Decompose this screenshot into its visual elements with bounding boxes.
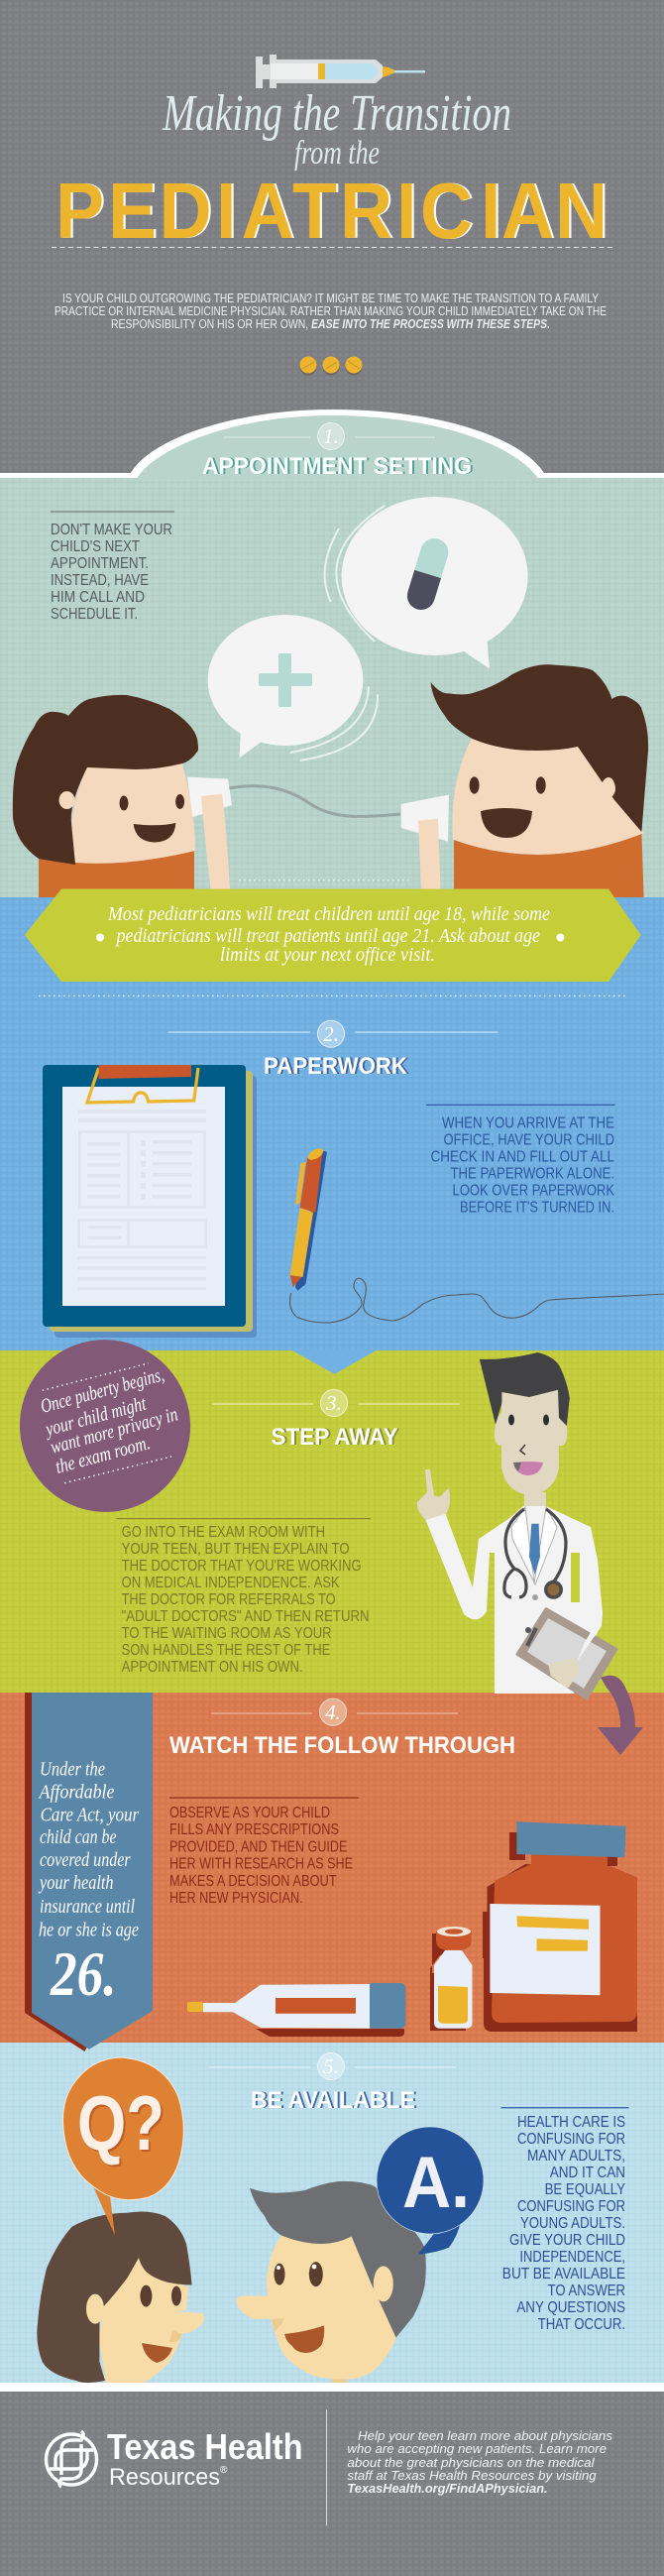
- text block: step away: "ADULT DOCTORS" AND THEN RETURN: [122, 1608, 370, 1625]
- illustration: girl: [37, 2211, 204, 2383]
- callout banner: age limits: Most pediatricians will treat children until age 18, while some: [107, 903, 550, 925]
- footer text: [347, 2428, 612, 2496]
- text block: appointment: DON'T MAKE YOUR: [51, 522, 172, 538]
- ribbon: affordable care act: your health: [38, 1872, 113, 1894]
- ribbon: affordable care act: child can be: [40, 1826, 117, 1848]
- text block: be available: [501, 2107, 628, 2333]
- illustration: vial: [430, 1927, 472, 2031]
- illustration: child with cup phone: [13, 695, 232, 897]
- step 1 number: [224, 422, 435, 450]
- text block: be available: AND IT CAN: [550, 2165, 625, 2181]
- text block: be available: MANY ADULTS,: [527, 2148, 625, 2165]
- title: making the transition: Making the Transition: [162, 85, 511, 142]
- icon: large speech bubble with capsule: [325, 497, 528, 668]
- blue notch: [291, 1350, 377, 1374]
- ribbon: affordable care act: Affordable: [38, 1781, 115, 1803]
- illustration: parent with cup phone: [401, 664, 648, 897]
- footer text: Help your teen learn more about physicians: [358, 2428, 612, 2443]
- icon: syringe: [256, 55, 425, 88]
- callout: puberty privacy: the exam room.: [54, 1432, 153, 1478]
- icon: purple arrow: [598, 1676, 643, 1755]
- text block: paperwork: THE PAPERWORK ALONE.: [450, 1165, 614, 1182]
- step 3 number: 3.: [325, 1391, 342, 1415]
- text block: be available: ANY QUESTIONS: [516, 2299, 625, 2316]
- callout: puberty privacy: your child might: [42, 1393, 149, 1441]
- title: pediatrician: PEDIATRICIAN: [57, 167, 609, 256]
- illustration: clipboard: [43, 1065, 257, 1338]
- intro text: [55, 292, 607, 331]
- text block: be available: BUT BE AVAILABLE: [502, 2266, 625, 2283]
- step 5 number: [209, 2052, 456, 2080]
- text block: step away: THE DOCTOR THAT YOU'RE WORKING: [122, 1558, 362, 1575]
- panel: be available background: [0, 2043, 664, 2383]
- step 1 number: 1.: [323, 424, 339, 448]
- text block: step away: THE DOCTOR FOR REFERRALS TO: [122, 1591, 336, 1608]
- ribbon: affordable care act: 26.: [50, 1938, 117, 2009]
- logo: wordmark: [107, 2426, 303, 2491]
- text block: follow through: HER WITH RESEARCH AS SHE: [169, 1855, 353, 1872]
- text block: paperwork: [426, 1105, 614, 1216]
- logo: wordmark: Texas Health: [107, 2426, 303, 2467]
- illustration: doctor: [417, 1352, 616, 1698]
- text block: paperwork: OFFICE, HAVE YOUR CHILD: [444, 1131, 614, 1148]
- text block: follow through: [169, 1797, 359, 1907]
- icon: small speech bubble with plus: [208, 615, 378, 761]
- logo: wordmark: ®: [220, 2465, 228, 2476]
- heading: paperwork: PAPERWORK: [264, 1053, 408, 1080]
- callout banner: age limits: [25, 888, 641, 982]
- text block: follow through: MAKES A DECISION ABOUT: [169, 1873, 337, 1890]
- text block: step away: GO INTO THE EXAM ROOM WITH: [122, 1524, 325, 1541]
- logo: texas health mark: [46, 2431, 97, 2487]
- panel: follow through background: [0, 1693, 664, 2043]
- text block: appointment: [51, 512, 174, 623]
- white footer divider: [0, 2383, 664, 2392]
- text block: be available: THAT OCCUR.: [538, 2316, 625, 2333]
- text block: step away: YOUR TEEN, BUT THEN EXPLAIN TO: [122, 1541, 350, 1558]
- text block: follow through: PROVIDED, AND THEN GUIDE: [169, 1838, 347, 1855]
- ribbon: affordable care act: Under the: [40, 1759, 105, 1781]
- text block: appointment: SCHEDULE IT.: [51, 606, 138, 623]
- heading: appointment setting: APPOINTMENT SETTING: [202, 453, 472, 480]
- text block: be available: BE EQUALLY: [545, 2181, 625, 2198]
- text block: step away: [117, 1518, 371, 1676]
- ribbon: affordable care act: he or she is age: [39, 1920, 139, 1941]
- ribbon: affordable care act: covered under: [40, 1849, 131, 1871]
- step 4 number: 4.: [325, 1700, 341, 1724]
- callout: puberty privacy: [0, 1321, 210, 1531]
- text block: appointment: CHILD'S NEXT: [51, 538, 140, 555]
- text block: be available: HEALTH CARE IS: [517, 2114, 625, 2131]
- icon: question speech bubble: [63, 2057, 183, 2235]
- text block: appointment: HIM CALL AND: [51, 589, 145, 606]
- text block: paperwork: LOOK OVER PAPERWORK: [452, 1182, 614, 1199]
- panel: step away background: [0, 1350, 664, 1693]
- step 4 number: [211, 1698, 458, 1725]
- title: from the: from the: [294, 135, 380, 172]
- footer text: about the great physicians on the medical: [347, 2455, 596, 2470]
- footer text: TexasHealth.org/FindAPhysician.: [347, 2481, 548, 2496]
- callout banner: age limits: pediatricians will treat patients until age 21. Ask about age: [115, 925, 540, 947]
- panel: header background: [0, 0, 664, 478]
- callout: puberty privacy: want more privacy in: [49, 1403, 180, 1459]
- panel: footer background: [0, 2392, 664, 2576]
- heading: step away: STEP AWAY: [272, 1424, 398, 1451]
- logo: wordmark: Resources: [109, 2464, 220, 2491]
- text block: be available: YOUNG ADULTS.: [520, 2215, 625, 2232]
- text block: paperwork: WHEN YOU ARRIVE AT THE: [442, 1114, 614, 1131]
- text block: step away: ON MEDICAL INDEPENDENCE. ASK: [122, 1575, 340, 1591]
- icon: question speech bubble: Q?: [79, 2081, 166, 2168]
- footer text: who are accepting new patients. Learn more: [347, 2441, 607, 2456]
- illustration: man: [236, 2181, 426, 2383]
- step 5 number: 5.: [323, 2054, 339, 2078]
- text block: step away: TO THE WAITING ROOM AS YOUR: [122, 1625, 332, 1642]
- text block: paperwork: BEFORE IT'S TURNED IN.: [460, 1199, 614, 1216]
- illustration: phone wire: [229, 786, 400, 817]
- step 2 number: 2.: [323, 1022, 339, 1046]
- heading: watch the follow through: WATCH THE FOLLOW THROUGH: [169, 1732, 515, 1759]
- heading: be available: BE AVAILABLE: [251, 2087, 415, 2114]
- step 3 number: [212, 1390, 460, 1416]
- text block: follow through: OBSERVE AS YOUR CHILD: [169, 1805, 330, 1821]
- footer text: staff at Texas Health Resources by visiting: [347, 2468, 597, 2483]
- heading: step away: STEP AWAY: [274, 1424, 400, 1451]
- icon: question speech bubble: Q?: [77, 2079, 165, 2166]
- title: pediatrician: PEDIATRICIAN: [55, 167, 608, 256]
- heading: be available: BE AVAILABLE: [253, 2087, 417, 2114]
- illustration: thermometer: [187, 1983, 405, 2037]
- text block: be available: INDEPENDENCE,: [519, 2249, 625, 2266]
- panel: appointment setting background: [0, 478, 664, 897]
- text block: appointment: APPOINTMENT.: [51, 555, 149, 572]
- ribbon: affordable care act: insurance until: [40, 1896, 135, 1918]
- illustration: large pill bottle: [483, 1821, 637, 2032]
- heading: paperwork: PAPERWORK: [266, 1053, 410, 1080]
- icon: answer speech bubble: A.: [402, 2143, 470, 2223]
- text block: step away: APPOINTMENT ON HIS OWN.: [122, 1659, 303, 1676]
- text block: appointment: INSTEAD, HAVE: [51, 572, 149, 589]
- callout banner: age limits: limits at your next office visit.: [220, 944, 435, 966]
- text block: be available: CONFUSING FOR: [517, 2198, 625, 2215]
- intro text: RESPONSIBILITY ON HIS OR HER OWN, EASE INTO THE PROCESS WITH THESE STEPS.: [111, 317, 550, 331]
- text block: be available: TO ANSWER: [548, 2283, 625, 2299]
- text block: be available: CONFUSING FOR: [517, 2131, 625, 2148]
- callout: puberty privacy: Once puberty begins,: [39, 1363, 166, 1418]
- signature line: [289, 1278, 664, 1323]
- step 2 number: [168, 1020, 498, 1047]
- icon: answer speech bubble: [377, 2127, 484, 2255]
- text block: step away: SON HANDLES THE REST OF THE: [122, 1642, 330, 1659]
- icon: three pills: [299, 357, 363, 375]
- text block: paperwork: CHECK IN AND FILL OUT ALL: [430, 1148, 614, 1165]
- text block: follow through: HER NEW PHYSICIAN.: [169, 1890, 303, 1907]
- ribbon: affordable care act: [25, 1693, 153, 2051]
- arch tab: [0, 410, 664, 480]
- panel: paperwork background: [0, 897, 664, 1350]
- text block: be available: GIVE YOUR CHILD: [509, 2232, 625, 2249]
- ribbon: affordable care act: Care Act, your: [41, 1805, 139, 1826]
- text block: follow through: FILLS ANY PRESCRIPTIONS: [169, 1821, 339, 1838]
- icon: pen: [290, 1146, 327, 1291]
- heading: appointment setting: APPOINTMENT SETTING: [204, 453, 474, 480]
